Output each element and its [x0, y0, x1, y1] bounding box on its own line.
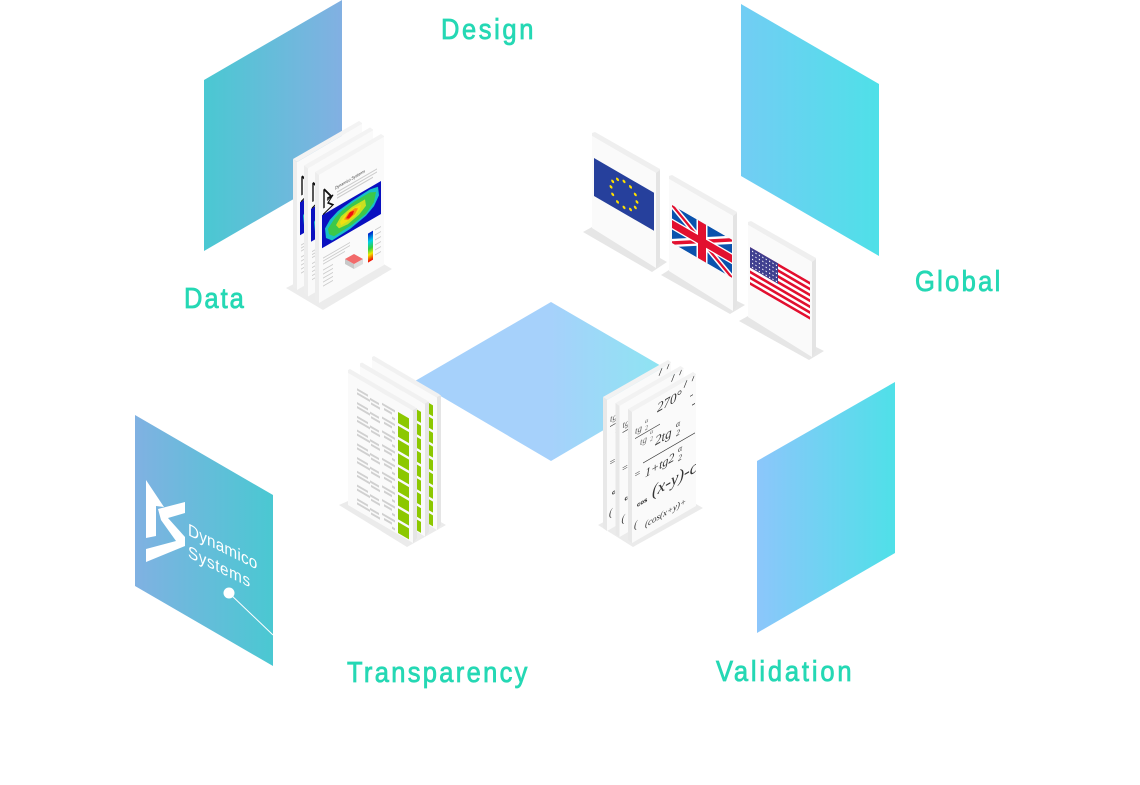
heading: Data: Data — [184, 281, 245, 314]
panel: global background — [741, 4, 879, 256]
validation math stack: 2tg — [655, 425, 672, 449]
validation math stack: (x-y)-c — [652, 456, 697, 502]
flag card: USA — [739, 221, 824, 360]
data report stack — [286, 121, 392, 310]
panel: central diamond — [415, 302, 687, 461]
validation math stack: (cos(x+y)+ — [645, 496, 686, 530]
validation math stack: 1+tg2 — [645, 449, 675, 480]
validation math stack: α — [678, 442, 683, 454]
validation math stack — [598, 360, 703, 547]
heading: Validation: Validation — [716, 654, 852, 687]
panel: validation background — [757, 382, 895, 633]
panel: Dynamico Systems logo — [135, 415, 273, 666]
flag card: EU — [583, 132, 667, 272]
flag card: UK — [661, 175, 745, 314]
validation math stack: α — [676, 417, 681, 429]
panel: Dynamico Systems logo: Systems — [188, 542, 250, 591]
heading: Global: Global — [915, 264, 1000, 297]
panel: Dynamico Systems logo: Dynamico — [188, 520, 257, 574]
validation math stack: 270° — [657, 387, 682, 416]
transparency table stack — [339, 356, 446, 547]
heading: Design: Design — [441, 12, 533, 45]
validation math stack: 2 — [676, 426, 681, 438]
heading: Transparency: Transparency — [347, 655, 528, 688]
panel: data background — [204, 0, 342, 251]
validation math stack: 2 — [678, 451, 683, 463]
